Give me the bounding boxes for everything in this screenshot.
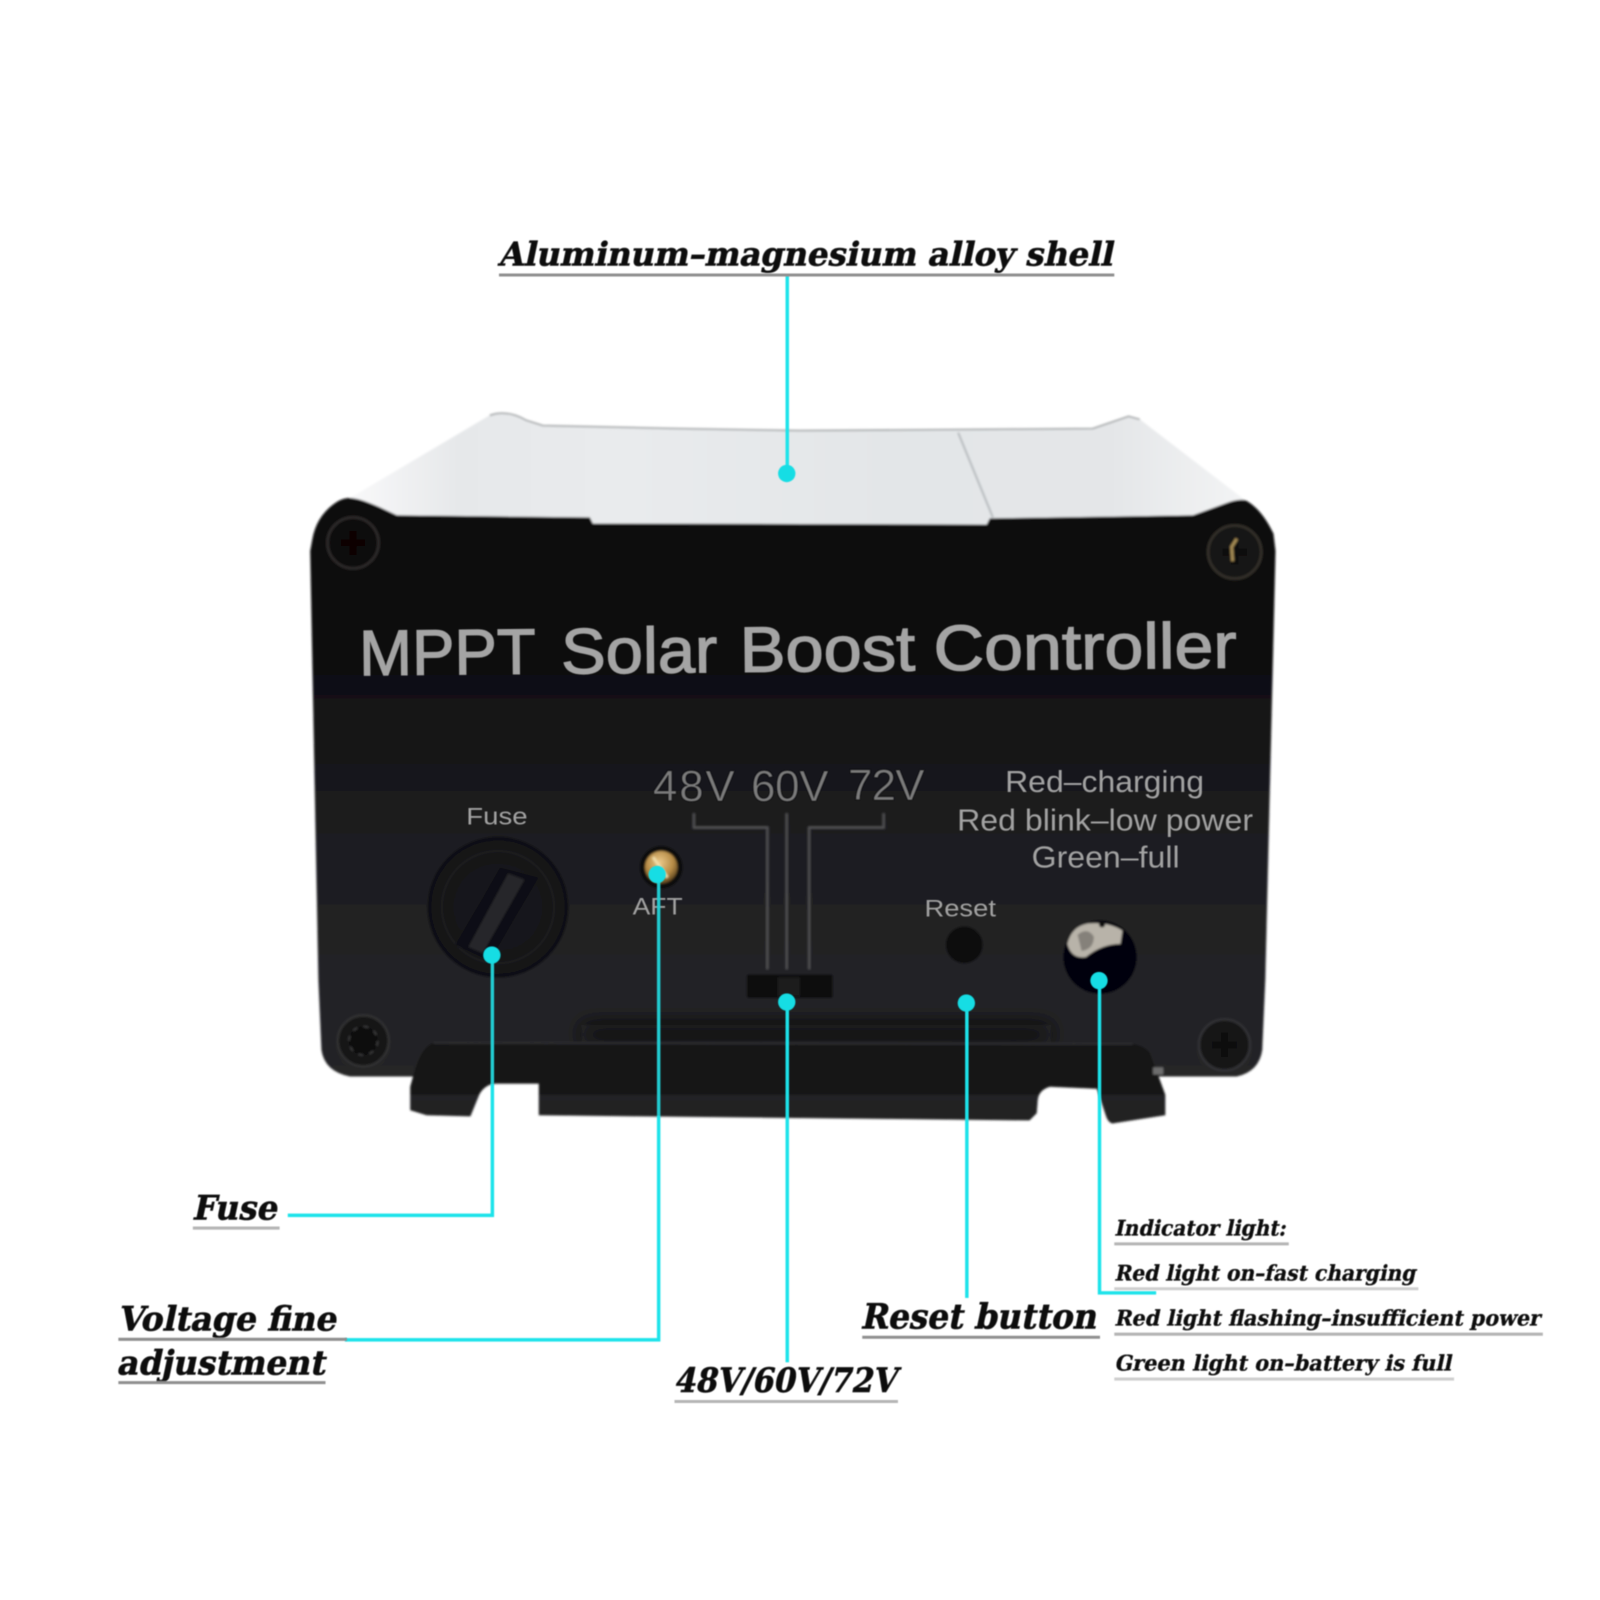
label: reset button: Reset button <box>858 1297 1103 1337</box>
screw bottom left <box>338 1015 389 1066</box>
status legend: Red blink–low power <box>957 805 1253 838</box>
label: voltage fine adjustment: Voltage fine <box>114 1300 342 1340</box>
device title: Controller <box>933 610 1237 684</box>
status legend: Green–full <box>1032 841 1180 874</box>
label: indicator light <box>1113 1217 1544 1379</box>
bottom foot bracket <box>410 1043 1165 1123</box>
label: indicator light: Red light on–fast charging <box>1113 1262 1419 1287</box>
device title: Solar <box>561 614 718 687</box>
shell top <box>350 413 1245 531</box>
voltage jumper <box>747 974 833 998</box>
label: indicator light: Indicator light: <box>1113 1217 1290 1242</box>
shadow above bracket <box>582 1024 1051 1045</box>
device title <box>359 610 1237 689</box>
leader: indicator <box>1090 972 1156 1293</box>
front plate <box>310 498 1276 1077</box>
label: voltage fine adjustment: adjustment <box>114 1344 331 1383</box>
status legend <box>957 766 1253 874</box>
fuse knob <box>428 837 568 978</box>
voltage selector traces <box>694 813 884 969</box>
label: 48V/60V/72V: 48V/60V/72V <box>672 1361 903 1401</box>
voltage marks: 48V <box>653 762 735 811</box>
leader: voltage selector <box>778 993 795 1362</box>
indicator light <box>1063 920 1137 994</box>
reset marking: Reset <box>924 895 996 922</box>
AFT marking: AFT <box>633 893 683 920</box>
controller device photo <box>310 413 1276 1123</box>
screw bottom right <box>1199 1019 1250 1070</box>
label: indicator light: Green light on–battery is full <box>1113 1352 1455 1376</box>
device title: Boost <box>739 612 916 686</box>
screw top right <box>1208 526 1261 579</box>
leader lines and dots <box>288 276 1156 1362</box>
leader: reset <box>958 994 975 1298</box>
screw top left <box>328 517 379 568</box>
leader: voltage fine adjustment <box>345 866 666 1340</box>
AFT adjust screw <box>640 846 683 889</box>
label: voltage fine adjustment <box>114 1300 347 1383</box>
leader: fuse <box>288 946 501 1215</box>
leader: shell <box>778 276 795 482</box>
voltage marks: 60V <box>751 762 829 811</box>
voltage marks: 72V <box>848 761 925 810</box>
panel printed text <box>359 610 1253 922</box>
label: aluminum shell: Aluminum–magnesium alloy shell <box>495 235 1119 273</box>
voltage marks <box>653 761 925 811</box>
device title: MPPT <box>359 616 536 689</box>
reset hole <box>946 927 983 963</box>
label: indicator light: Red light flashing–insufficient power <box>1113 1307 1544 1331</box>
callout labels <box>114 235 1544 1402</box>
fuse marking: Fuse <box>466 803 528 830</box>
status legend: Red–charging <box>1005 766 1204 799</box>
label: fuse: Fuse <box>190 1189 283 1228</box>
